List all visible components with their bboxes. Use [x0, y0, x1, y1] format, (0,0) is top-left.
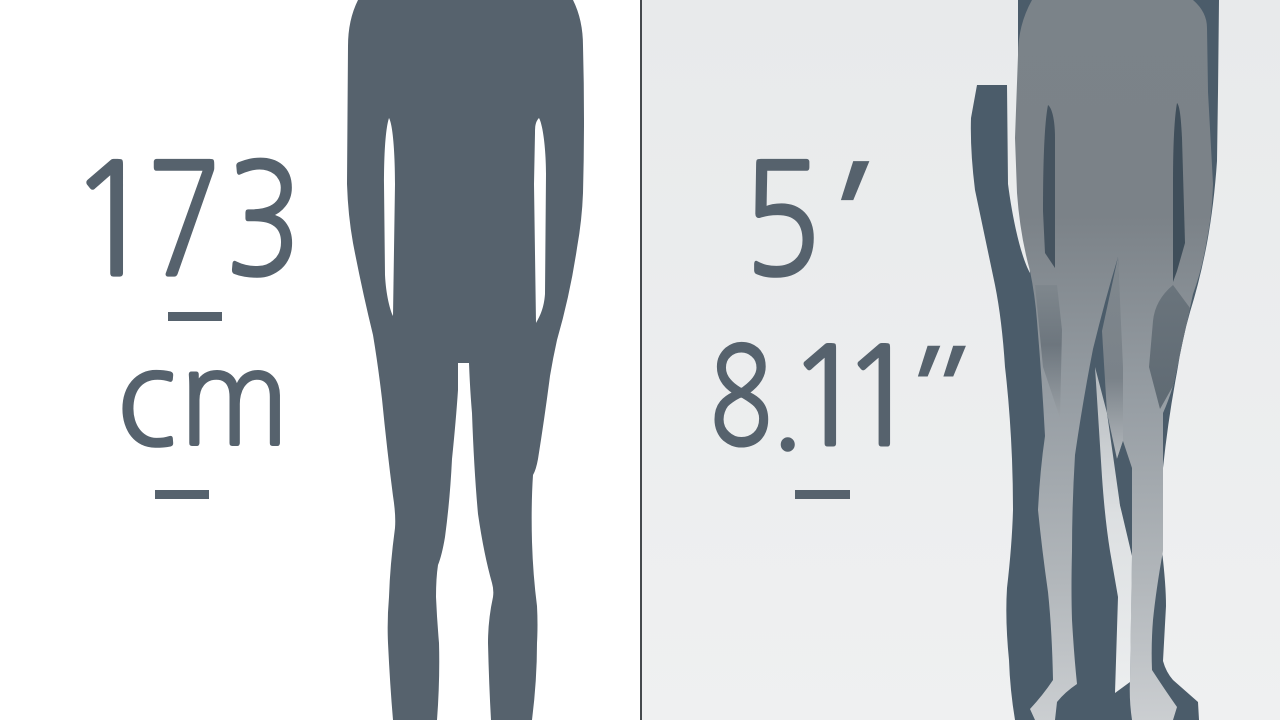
- central wedge: [1102, 257, 1123, 459]
- metric unit: cm: m: [179, 331, 290, 465]
- figure: overlapping silhouettes: [971, 0, 1219, 720]
- imperial value: inches: 1: [840, 330, 921, 465]
- metric value: 173: 7: [146, 143, 223, 298]
- imperial value: feet: 5: [742, 142, 822, 298]
- back silhouette: [971, 0, 1219, 720]
- metric unit: cm: [117, 331, 290, 465]
- right arm slot: [1173, 103, 1185, 282]
- panel: imperial height: [642, 0, 1280, 720]
- metric underline: 173: [168, 312, 222, 321]
- right thigh shadow: [1149, 285, 1190, 409]
- left arm slot: [1043, 105, 1055, 268]
- metric underline: cm: [155, 490, 209, 499]
- imperial value: inches: 1: [786, 330, 867, 465]
- divider: [640, 0, 642, 720]
- central light strip: [1095, 367, 1132, 693]
- imperial value: inches: 8: [709, 330, 773, 465]
- metric value: 173: 1: [66, 144, 158, 298]
- front silhouette: [1015, 0, 1213, 720]
- imperial underline: [795, 490, 850, 499]
- left thigh shadow: [1035, 285, 1062, 418]
- panel: metric height: [0, 0, 640, 720]
- figure: front silhouette: [347, 0, 584, 720]
- metric value: 173: 3: [225, 143, 302, 298]
- imperial value: inches: [709, 316, 983, 474]
- imperial value: inches: .: [767, 330, 807, 465]
- dark sliver: [1117, 441, 1132, 551]
- metric value: 173: [66, 143, 302, 298]
- imperial value: inches: ": [875, 316, 983, 474]
- imperial value: feet: ': [785, 123, 892, 324]
- metric unit: cm: c: [117, 332, 176, 465]
